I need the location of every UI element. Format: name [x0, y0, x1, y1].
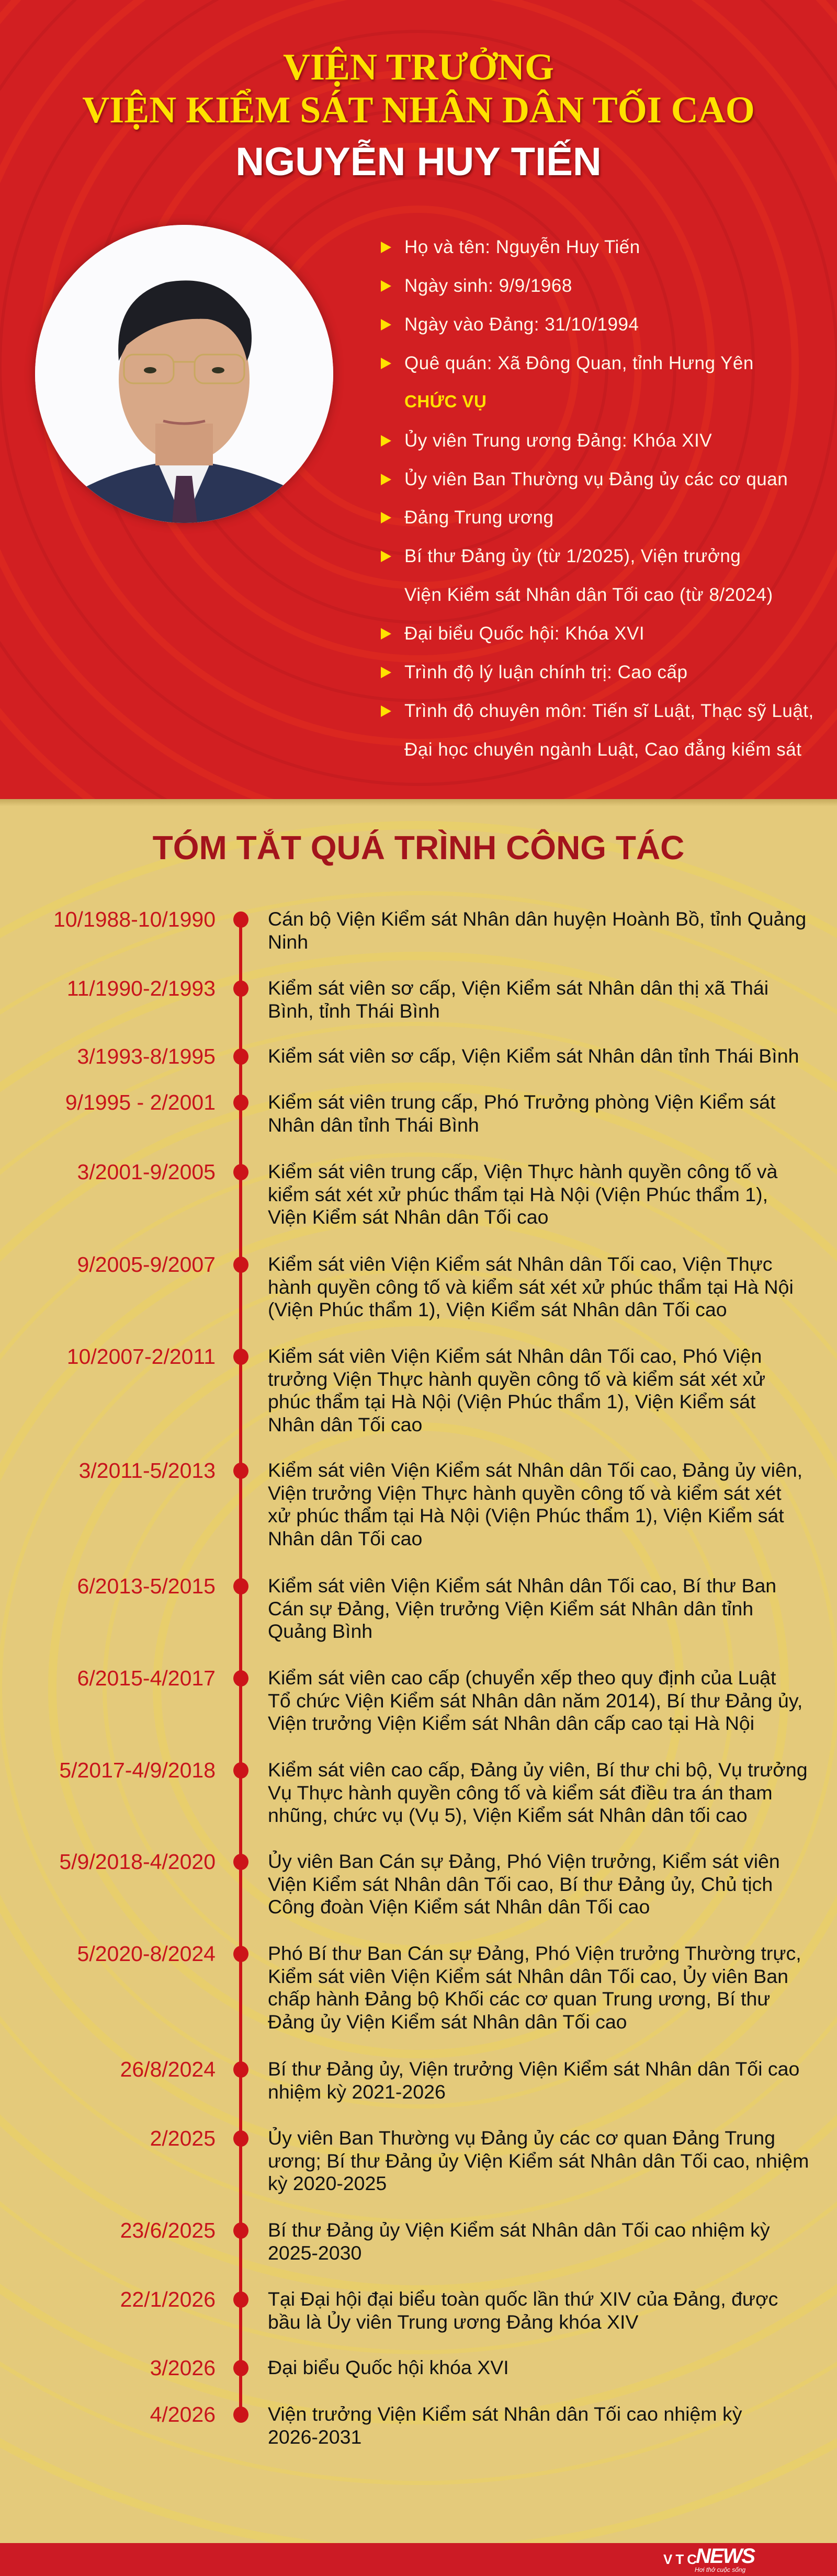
entry 12: Công đoàn Viện Kiểm sát Nhân dân Tối cao — [268, 1896, 650, 1918]
entry 6: (Viện Phúc thẩm 1), Viện Kiểm sát Nhân dân Tối cao — [268, 1298, 727, 1320]
entry 1: Ninh — [268, 931, 308, 953]
entry 4: Kiểm sát viên trung cấp, Phó Trưởng phòng Viện Kiểm sát — [268, 1091, 775, 1113]
entry 3: 3/1993-8/1995 — [77, 1044, 216, 1068]
timeline vertical line — [239, 919, 242, 2415]
info: hometown: Quê quán: Xã Đông Quan, tỉnh Hưng Yên — [404, 353, 754, 373]
info: secretary: Viện Kiểm sát Nhân dân Tối cao (từ 8/2024) — [404, 585, 773, 605]
entry 7: 10/2007-2/2011 — [67, 1344, 216, 1369]
entry 8: xử phúc thẩm tại Hà Nội (Viện Phúc thẩm 1), Viện Kiểm sát — [268, 1504, 784, 1526]
entry 10 — [77, 1666, 802, 1734]
entry 6: 9/2005-9/2007 — [77, 1252, 216, 1276]
info: political theory: Trình độ lý luận chính trị: Cao cấp — [404, 662, 687, 682]
title line 1: VIỆN TRƯỞNG — [283, 46, 554, 88]
info: birth date: Ngày sinh: 9/9/1968 — [404, 276, 572, 296]
entry 9: Kiểm sát viên Viện Kiểm sát Nhân dân Tối cao, Bí thư Ban — [268, 1575, 776, 1597]
entry 15: ương; Bí thư Đảng ủy Viện Kiểm sát Nhân dân Tối cao, nhiệm — [268, 2149, 809, 2171]
subheading: positions: CHỨC VỤ — [404, 392, 487, 411]
entry 18: 3/2026 — [150, 2356, 216, 2380]
entry 5 — [77, 1160, 777, 1228]
info: central committee: Ủy viên Trung ương Đảng: Khóa XIV — [404, 430, 712, 451]
entry 8: Viện trưởng Viện Thực hành quyền công tố và kiểm sát xét — [268, 1482, 782, 1504]
logo: VTC News: NEWS — [696, 2545, 754, 2568]
portrait photo — [35, 225, 333, 523]
entry 2: Bình, tỉnh Thái Bình — [268, 1000, 440, 1022]
logo: VTC News: VTC — [663, 2551, 700, 2567]
entry 3 — [77, 1044, 799, 1068]
entry 16: 23/6/2025 — [120, 2218, 216, 2242]
info: national assembly: Đại biểu Quốc hội: Khóa XVI — [404, 623, 644, 644]
yellow background pattern — [0, 799, 837, 2543]
entry 3: Kiểm sát viên sơ cấp, Viện Kiểm sát Nhân dân tỉnh Thái Bình — [268, 1045, 799, 1067]
entry 2 — [67, 976, 768, 1022]
info: secretary — [381, 546, 773, 605]
info: full name: Họ và tên: Nguyễn Huy Tiến — [404, 237, 640, 257]
entry 4: 9/1995 - 2/2001 — [65, 1090, 216, 1114]
entry 18 — [150, 2356, 509, 2380]
entry 15: kỳ 2020-2025 — [268, 2172, 387, 2194]
entry 12: Ủy viên Ban Cán sự Đảng, Phó Viện trưởng, Kiểm sát viên — [268, 1850, 780, 1872]
entry 19 — [150, 2402, 742, 2447]
entry 8: Kiểm sát viên Viện Kiểm sát Nhân dân Tối cao, Đảng ủy viên, — [268, 1459, 802, 1481]
entry 13: Đảng ủy Viện Kiểm sát Nhân dân Tối cao — [268, 2010, 627, 2032]
entry 15 — [150, 2126, 809, 2194]
entry 13: Kiểm sát viên Viện Kiểm sát Nhân dân Tối cao, Ủy viên Ban — [268, 1965, 788, 1987]
title line 2: VIỆN KIỂM SÁT NHÂN DÂN TỐI CAO — [82, 89, 755, 131]
entry 1: 10/1988-10/1990 — [53, 907, 216, 931]
entry 9: Quảng Bình — [268, 1620, 372, 1642]
entry 8: Nhân dân Tối cao — [268, 1527, 422, 1549]
entry 17: bầu là Ủy viên Trung ương Đảng khóa XIV — [268, 2310, 638, 2332]
entry 12: Viện Kiểm sát Nhân dân Tối cao, Bí thư Đảng ủy, Chủ tịch — [268, 1873, 773, 1895]
entry 7: trưởng Viện Thực hành quyền công tố và kiểm sát xét xử — [268, 1368, 765, 1390]
info list — [381, 237, 814, 760]
entry 6: hành quyền công tố và kiểm sát xét xử phúc thẩm tại Hà Nội — [268, 1276, 794, 1298]
entry 13: Phó Bí thư Ban Cán sự Đảng, Phó Viện trưởng Thường trực, — [268, 1942, 801, 1964]
entry 8: 3/2011-5/2013 — [79, 1458, 216, 1483]
logo: VTC News: Hơi thở cuộc sống — [695, 2566, 745, 2573]
entry 17: 22/1/2026 — [120, 2287, 216, 2311]
info: secretary: Bí thư Đảng ủy (từ 1/2025), Viện trưởng — [404, 546, 741, 566]
entry 9: Cán sự Đảng, Viện trưởng Viện Kiểm sát Nhân dân tỉnh — [268, 1597, 753, 1619]
entry 6: Kiểm sát viên Viện Kiểm sát Nhân dân Tối cao, Viện Thực — [268, 1253, 773, 1275]
entry 11: Vụ Thực hành quyền công tố và kiểm sát điều tra án tham — [268, 1781, 773, 1803]
entry 19: Viện trưởng Viện Kiểm sát Nhân dân Tối cao nhiệm kỳ — [268, 2403, 742, 2425]
entry 5: Viện Kiểm sát Nhân dân Tối cao — [268, 1206, 548, 1228]
entry 18: Đại biểu Quốc hội khóa XVI — [268, 2356, 509, 2378]
entry 17 — [120, 2287, 778, 2332]
info: education: Trình độ chuyên môn: Tiến sĩ Luật, Thạc sỹ Luật, — [404, 701, 814, 721]
entry 11 — [59, 1758, 808, 1826]
entry 11: Kiểm sát viên cao cấp, Đảng ủy viên, Bí thư chi bộ, Vụ trưởng — [268, 1759, 808, 1781]
entry 4: Nhân dân tỉnh Thái Bình — [268, 1114, 479, 1136]
entry 9: 6/2013-5/2015 — [77, 1574, 216, 1598]
entry 7: Kiểm sát viên Viện Kiểm sát Nhân dân Tối cao, Phó Viện — [268, 1345, 762, 1367]
entry 5: 3/2001-9/2005 — [77, 1160, 216, 1184]
entry 14: nhiệm kỳ 2021-2026 — [268, 2080, 446, 2102]
entry 9 — [77, 1574, 776, 1642]
info: central party: Đảng Trung ương — [404, 507, 553, 528]
entry 11: 5/2017-4/9/2018 — [59, 1758, 216, 1782]
entry 11: nhũng, chức vụ (Vụ 5), Viện Kiểm sát Nhân dân tối cao — [268, 1804, 748, 1826]
entry 16 — [120, 2218, 770, 2263]
info: standing committee: Ủy viên Ban Thường vụ Đảng ủy các cơ quan — [404, 469, 788, 489]
entry 10: Kiểm sát viên cao cấp (chuyển xếp theo quy định của Luật — [268, 1667, 776, 1689]
entry 2: Kiểm sát viên sơ cấp, Viện Kiểm sát Nhân dân thị xã Thái — [268, 977, 768, 999]
entry 16: Bí thư Đảng ủy Viện Kiểm sát Nhân dân Tối cao nhiệm kỳ — [268, 2219, 770, 2241]
entry 7 — [67, 1344, 765, 1435]
footer bar — [0, 2543, 837, 2576]
info: party date: Ngày vào Đảng: 31/10/1994 — [404, 314, 639, 335]
entry 14: Bí thư Đảng ủy, Viện trưởng Viện Kiểm sát Nhân dân Tối cao — [268, 2058, 799, 2080]
entry 8 — [79, 1458, 802, 1549]
entry 12: 5/9/2018-4/2020 — [59, 1850, 216, 1874]
info: education — [381, 701, 814, 760]
timeline — [53, 907, 809, 2447]
header panel: red background — [0, 0, 837, 799]
entry 14 — [120, 2057, 799, 2102]
entry 1: Cán bộ Viện Kiểm sát Nhân dân huyện Hoành Bồ, tỉnh Quảng — [268, 908, 806, 930]
entry 10: Tổ chức Viện Kiểm sát Nhân dân năm 2014), Bí thư Đảng ủy, — [268, 1689, 802, 1711]
entry 7: Nhân dân Tối cao — [268, 1413, 422, 1435]
entry 19: 4/2026 — [150, 2402, 216, 2426]
entry 2: 11/1990-2/1993 — [67, 976, 216, 1000]
logo: VTC News — [663, 2545, 755, 2573]
entry 13 — [77, 1942, 801, 2032]
name heading: NGUYỄN HUY TIẾN — [235, 140, 602, 184]
entry 10: Viện trưởng Viện Kiểm sát Nhân dân cấp cao tại Hà Nội — [268, 1712, 754, 1734]
entry 7: phúc thẩm tại Hà Nội (Viện Phúc thẩm 1), Viện Kiểm sát — [268, 1390, 755, 1412]
entry 19: 2026-2031 — [268, 2425, 361, 2447]
entry 5: kiểm sát xét xử phúc thẩm tại Hà Nội (Viện Phúc thẩm 1), — [268, 1183, 768, 1205]
entry 15: 2/2025 — [150, 2126, 216, 2150]
entry 13: 5/2020-8/2024 — [77, 1942, 216, 1966]
entry 5: Kiểm sát viên trung cấp, Viện Thực hành quyền công tố và — [268, 1160, 777, 1182]
section heading: TÓM TẮT QUÁ TRÌNH CÔNG TÁC — [153, 829, 684, 867]
info: education: Đại học chuyên ngành Luật, Cao đẳng kiểm sát — [404, 739, 801, 760]
entry 1 — [53, 907, 806, 953]
entry 16: 2025-2030 — [268, 2241, 361, 2263]
entry 17: Tại Đại hội đại biểu toàn quốc lần thứ XIV của Đảng, được — [268, 2288, 778, 2310]
entry 15: Ủy viên Ban Thường vụ Đảng ủy các cơ quan Đảng Trung — [268, 2127, 775, 2149]
entry 13: chấp hành Đảng bộ Khối các cơ quan Trung ương, Bí thư — [268, 1988, 770, 2010]
entry 4 — [65, 1090, 775, 1136]
entry 6 — [77, 1252, 794, 1320]
entry 14: 26/8/2024 — [120, 2057, 216, 2081]
entry 12 — [59, 1850, 780, 1918]
entry 10: 6/2015-4/2017 — [77, 1666, 216, 1690]
